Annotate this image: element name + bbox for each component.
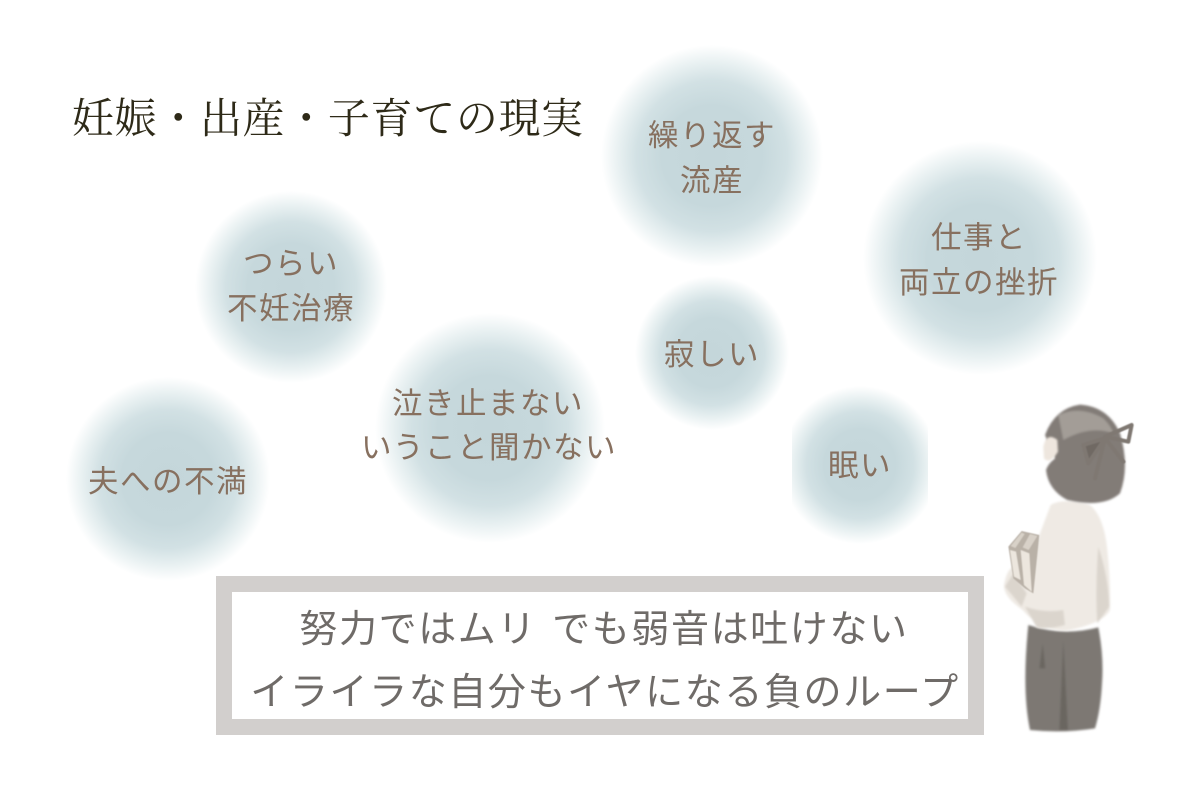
bubble: crying and not listening xyxy=(361,313,617,543)
bubble: lonely: 寂しい xyxy=(664,338,760,372)
bubble: lonely xyxy=(635,276,789,430)
title: 妊娠・出産・子育ての現実 xyxy=(72,97,584,143)
bubble: repeated miscarriage: 繰り返す xyxy=(648,119,776,153)
bubble: work conflict xyxy=(863,141,1097,375)
message box: イライラな自分もイヤになる負のループ xyxy=(250,672,960,714)
bubble: repeated miscarriage xyxy=(601,45,823,267)
bubble: sleepy xyxy=(792,390,928,540)
bubble: crying and not listening: 泣き止まない xyxy=(392,387,584,421)
trousers xyxy=(1025,625,1103,731)
bubble: infertility treatment: つらい xyxy=(243,247,339,281)
bubble: work conflict: 両立の挫折 xyxy=(899,266,1059,300)
hair xyxy=(1045,405,1125,503)
bubble: work conflict: 仕事と xyxy=(931,221,1027,255)
bubble: crying and not listening: いうこと聞かない xyxy=(361,431,617,465)
bubble: repeated miscarriage: 流産 xyxy=(680,164,744,198)
message box: 努力ではムリ でも弱音は吐けない xyxy=(299,609,909,651)
message box xyxy=(224,584,976,727)
bubble: sleepy: 眠い xyxy=(828,449,892,483)
bubble: infertility treatment xyxy=(195,191,387,383)
bubble: infertility treatment: 不妊治療 xyxy=(227,292,355,326)
blouse xyxy=(1004,501,1110,631)
ear xyxy=(1043,437,1058,461)
illustration: girl holding books seen from behind xyxy=(1004,405,1132,731)
bubble: dissatisfaction with husband xyxy=(66,377,270,581)
bubble: dissatisfaction with husband: 夫への不満 xyxy=(88,465,248,499)
books xyxy=(1008,531,1039,593)
ribbon xyxy=(1083,425,1132,478)
